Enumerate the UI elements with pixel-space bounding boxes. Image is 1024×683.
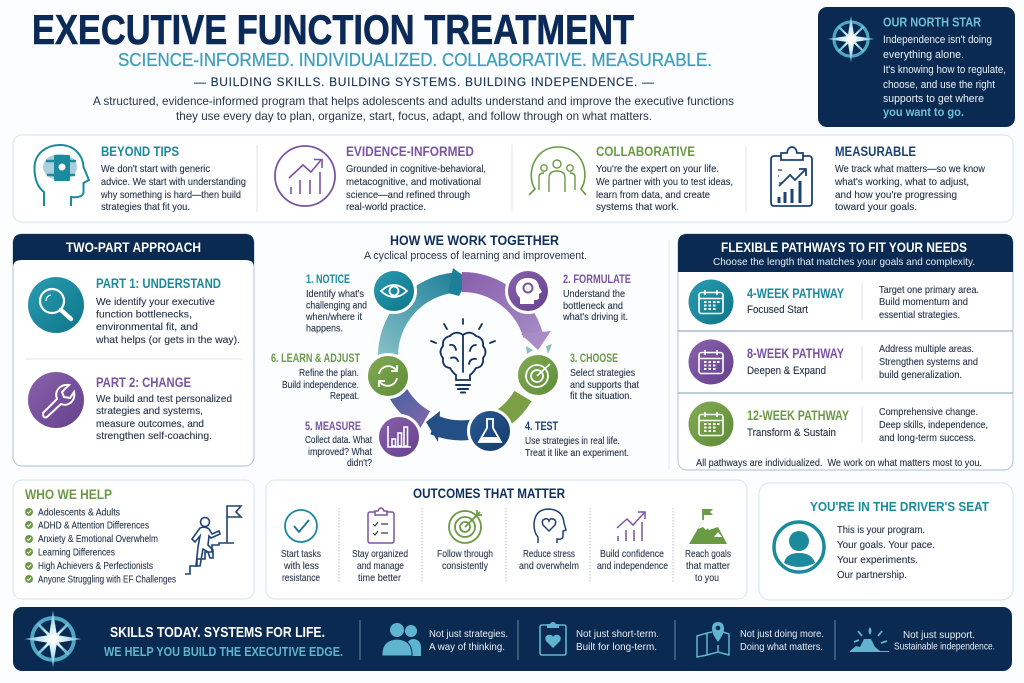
panel: who we help [13,480,254,599]
checklist [25,508,176,586]
label: Build confidence [600,549,664,560]
step 2 text: what's driving it. [562,311,628,323]
description: A structured, evidence-informed program that helps adolescents and adults understand and improve the executive functions [93,94,734,108]
icon: sunrise person [850,627,889,652]
icon: magnifier [28,277,84,333]
title: EXECUTIVE FUNCTION TREATMENT [32,6,634,53]
step 4 text: 4. TEST [525,419,558,433]
item: thinking [382,622,508,656]
checklist: ADHD & Attention Differences [38,520,149,532]
step 3 icon: target [516,354,560,396]
icon: brain bulb [431,319,495,392]
icon: compass star [828,16,874,62]
icon: calendar [688,340,734,384]
step 4 text [525,419,629,459]
step 2 text: Understand the [563,288,625,300]
label: Follow through [437,549,493,560]
icon: person climbing stairs to flag [185,506,241,574]
description: Address multiple areas. [879,343,974,355]
north star text: everything alone. [883,49,964,61]
label: Reach goals [685,549,731,560]
step 1 text: Identify what's [306,288,364,300]
checklist: Anyone Struggling with EF Challenges [38,574,176,586]
description [879,284,979,321]
body: You're the expert on your life. [596,163,719,175]
outcome: build confidence [597,512,668,572]
item: independence [850,627,995,652]
text: Not just support. [903,629,975,641]
text: Sustainable independence. [894,640,995,652]
description: Strengthen systems and [879,356,978,368]
body [596,163,733,213]
label: to you [695,573,719,584]
body: advice. We start with understanding [101,176,246,188]
icon: wrench [28,372,84,428]
name: Focused Start [747,304,808,316]
step 1 text: happens. [306,322,343,334]
body: science—and refined through [346,189,470,201]
item: long-term [540,622,659,655]
body: function bottlenecks, [96,308,192,320]
pathway: 8-week [688,340,978,384]
outcome: reach goals [685,509,731,584]
banner: bottom [13,607,1012,671]
north star text: Independence isn't doing [883,34,992,46]
tagline: SKILLS TODAY. SYSTEMS FOR LIFE. [110,625,325,641]
step 6 icon: refresh [366,354,410,398]
icon: group of people [529,147,586,195]
body: and how you're progressing [835,189,957,201]
step 5 text: Collect data. What [305,434,372,446]
body [837,524,935,581]
arrow: choose to test [503,396,523,418]
name: Transform & Sustain [747,427,836,439]
step 4 text: Use strategies in real life. [525,435,620,447]
icon: rising chart [617,512,645,541]
body: strategies that fit you. [101,201,190,213]
north star text: supports to get where [883,93,984,105]
description [879,406,988,444]
step 3 text: Select strategies [570,367,635,379]
text: Built for long-term. [576,641,657,653]
icon: check circle [285,510,317,542]
step 1 text: challenging and [306,300,367,312]
panel: flexible pathways [678,234,1013,470]
pillar: beyond tips [34,144,246,213]
north star text: It's knowing how to regulate, [883,64,1006,76]
step 6 text: Refine the plan. [299,367,359,379]
icon: calendar [688,280,734,324]
body: metacognitive, and motivational [346,176,481,188]
heading: BEYOND TIPS [101,144,179,159]
panel: outcomes that matter [266,480,747,599]
step 6 text: 6. LEARN & ADJUST [271,351,360,365]
panel: our north star [818,7,1015,127]
step 2 text: bottleneck and [563,300,623,312]
text: A way of thinking. [429,641,505,653]
heading: 4-WEEK PATHWAY [747,286,844,301]
label: and overwhelm [519,561,579,572]
text: Doing what matters. [740,641,823,653]
heading: WHO WE HELP [25,487,112,502]
step 4 text: Treat it like an experiment. [525,447,629,459]
step 2 text: 2. FORMULATE [563,272,631,286]
checklist: Adolescents & Adults [38,508,120,518]
step 5 icon: bars [378,416,420,458]
pathway: 4-week [688,280,979,324]
icon: chart in circle [275,146,335,206]
heading: TWO-PART APPROACH [66,240,201,255]
heading: MEASURABLE [835,144,916,159]
step 5 text: 5. MEASURE [305,419,361,433]
body: measure outcomes, and [96,418,204,430]
heading: COLLABORATIVE [596,144,695,159]
panel: two-part approach [13,234,254,466]
pillar: measurable [771,144,985,213]
body: strategies and systems, [96,405,203,417]
label: that matter [686,561,731,572]
checklist: Learning Differences [38,548,115,558]
step 6 text: Build independence. [282,379,359,391]
description: build generalization. [879,369,962,381]
label: Start tasks [281,549,321,560]
text [429,628,508,653]
part 2 [28,372,232,442]
description: essential strategies. [879,309,960,321]
heading: EVIDENCE-INFORMED [346,144,474,159]
label [352,549,408,584]
outcome: reduce stress [519,509,579,572]
step 3 text: fit the situation. [570,390,632,402]
checklist: Anxiety & Emotional Overwhelm [38,534,158,545]
step 2 text [562,272,631,323]
body: We track what matters—so we know [835,163,985,175]
outcome: start tasks [281,510,321,584]
part 1 [28,276,240,346]
body: Your experiments. [837,554,918,566]
step 3 text: and supports that [570,379,639,391]
body: what helps (or gets in the way). [95,334,240,346]
text: Not just doing more. [740,628,824,640]
label [597,549,668,572]
label: consistently [442,561,488,572]
arrow: notice to formulate [388,268,468,358]
heading: OUTCOMES THAT MATTER [413,486,565,501]
description: Build momentum and [879,296,968,308]
icon: clipboard chart [771,147,812,206]
body: Our partnership. [837,569,907,581]
body: systems that work. [596,201,679,213]
body [834,163,985,213]
body: toward your goals. [835,201,917,213]
label: with less [283,561,319,572]
icon: compass star [24,610,82,668]
step 3 text: 3. CHOOSE [570,351,618,365]
icon: head with heart [534,509,566,543]
text [894,629,995,652]
icon: mountain with flag [689,509,727,544]
tagline: — BUILDING SKILLS. BUILDING SYSTEMS. BUILDING INDEPENDENCE. — [194,75,654,89]
body: Grounded in cognitive-behavioral, [346,163,486,175]
step 5 text: improved? What [308,446,372,458]
body: We build and test personalized [96,393,232,405]
icon: person in circle [774,522,824,572]
panel: pillars [13,135,1013,222]
label: time better [358,573,402,584]
pillar: collaborative [529,144,733,213]
heading: PART 1: UNDERSTAND [96,276,221,291]
heading: 8-WEEK PATHWAY [747,346,844,361]
icon: checklist clipboard [368,508,394,543]
icon: clipboard heart [540,622,566,655]
label: Stay organized [352,549,408,560]
body: real-world practice. [346,201,426,213]
item: what matters [697,622,824,657]
tagline 2: WE HELP YOU BUILD THE EXECUTIVE EDGE. [104,644,343,659]
north star text [883,34,1006,119]
text: Not just short-term. [576,628,659,640]
description [93,94,734,123]
text: Not just strategies. [429,628,508,640]
body: We partner with you to test ideas, [596,176,733,188]
step 1 text: when/where it [305,311,362,323]
label: and manage [357,561,404,572]
icon: calendar [688,402,734,446]
footer note: All pathways are individualized. We work on what matters most to you. [696,457,982,469]
description: they use every day to plan, organize, start, focus, adapt, and follow through on what matters. [176,109,652,123]
north star heading: OUR NORTH STAR [883,14,982,30]
heading: HOW WE WORK TOGETHER [390,233,559,248]
heading: PART 2: CHANGE [96,375,191,390]
body: strengthen self-coaching. [96,430,212,442]
body: This is your program. [837,524,925,536]
step 4 icon: flask [468,410,512,452]
step 6 text: Repeat. [330,390,359,402]
body: environmental fit, and [96,321,198,333]
description: Comprehensive change. [879,406,978,418]
cycle diagram [366,268,560,458]
label [437,549,493,572]
step 6 text [271,351,360,402]
subheading: A cyclical process of learning and improvement. [364,250,587,262]
body [346,163,486,213]
icon: map pin [697,622,729,657]
body: why something is hard—then build [100,189,241,201]
description: and long-term success. [879,432,976,444]
label: Reduce stress [523,549,575,560]
pathway: 12-week [688,402,988,446]
body: Your goals. Your pace. [837,539,935,551]
heading: 12-WEEK PATHWAY [747,408,849,423]
pillar: evidence-informed [275,144,486,213]
outcome: follow through [437,510,493,572]
text [740,628,824,653]
step 1 text: 1. NOTICE [306,272,350,286]
step 1 text [305,272,367,334]
description: Deep skills, independence, [879,419,988,431]
subheading: Choose the length that matches your goals and complexity. [713,256,975,268]
north star text: choose, and use the right [883,79,995,91]
arrow: test to measure [426,411,476,442]
north star text: you want to go. [883,107,964,119]
text [576,628,659,653]
icon: target [449,510,482,543]
heading: FLEXIBLE PATHWAYS TO FIT YOUR NEEDS [721,239,967,255]
label [519,549,579,572]
body [96,393,232,442]
step 5 text [305,419,372,469]
subtitle: SCIENCE-INFORMED. INDIVIDUALIZED. COLLABORATIVE. MEASURABLE. [118,50,712,70]
arrow: formulate to choose [462,282,552,354]
section: how we work together [271,233,639,469]
arrow: measure to learn [392,380,425,420]
name: Deepen & Expand [747,365,826,377]
description: Target one primary area. [879,284,979,296]
step 1 icon: eye [372,270,416,312]
heading: YOU'RE IN THE DRIVER'S SEAT [810,499,989,514]
label: resistance [282,573,320,584]
step 3 text [570,351,639,402]
label: and independence [597,561,668,572]
step 5 text: didn't? [347,457,372,469]
description [879,343,978,381]
panel: driver's seat [759,483,1013,600]
outcome: stay organized [352,508,408,584]
icon: people [382,622,421,656]
step 2 icon: head gear [506,270,550,312]
body [95,296,240,346]
checklist: High Achievers & Perfectionists [38,561,153,572]
label [685,549,731,584]
body: learn from data, and create [596,189,710,201]
label [281,549,321,584]
body: We identify your executive [96,296,215,308]
icon: head with puzzle [34,145,89,206]
body: what's working, what to adjust, [834,176,969,188]
body [100,163,246,213]
body: We don't start with generic [101,163,210,175]
